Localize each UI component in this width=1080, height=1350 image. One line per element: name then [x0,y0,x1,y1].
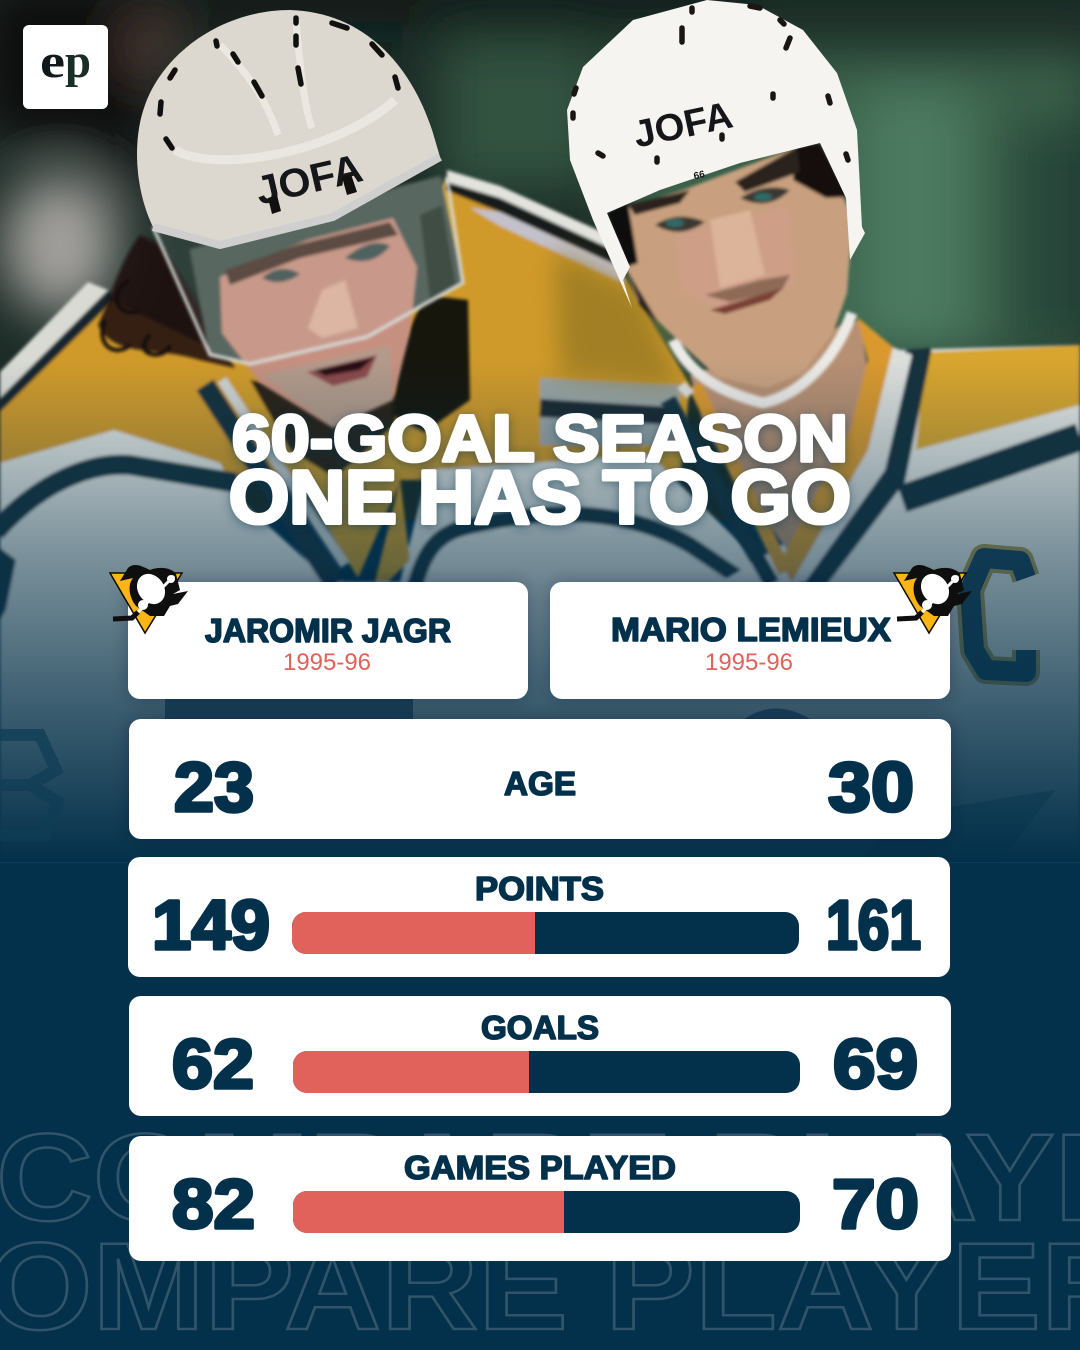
title: ONE HAS TO GO [229,455,851,539]
panel: Mario Lemieux name: 1995-96 [705,649,793,676]
brand logo [23,25,108,109]
panel: games played [129,1136,951,1261]
panel: points: 161 [826,886,921,964]
brand logo: p [65,35,91,88]
panel: age: 23 [174,748,254,826]
right player helmet: 66 [693,169,706,182]
panel: points: 149 [152,886,270,964]
right player helmet [567,0,865,308]
right player helmet: JOFA [630,95,736,156]
panel: points [128,857,950,977]
panel: goals: 62 [172,1025,254,1103]
right player chin strap and face [607,143,857,403]
panel: age: AGE [504,765,576,802]
left player helmet [137,10,440,245]
left player visor and face [153,175,463,428]
panel: games played: 82 [172,1165,255,1243]
brand logo: e [40,35,65,88]
title [229,401,851,539]
panel: Jaromir Jagr name [128,582,528,699]
panel: age: 30 [828,748,914,826]
captain C patch [970,558,1026,672]
panel: games played: 70 [832,1165,919,1243]
panel: Jaromir Jagr name: JAROMIR JAGR [205,612,451,649]
fade overlay to navy [0,360,1080,862]
left player hair [98,235,470,432]
icon: Penguins logo left [110,565,188,633]
icon: Penguins logo right [894,565,972,633]
panel: Mario Lemieux name: MARIO LEMIEUX [611,611,891,648]
panel: points: POINTS [475,870,604,907]
panel: goals: 69 [833,1025,918,1103]
watermark: compare player outline text [0,1109,1080,1350]
olive shadow on left player's shoulder [555,250,680,385]
panel: Mario Lemieux name [550,582,950,699]
panel: age [129,719,951,839]
right player jersey and collar [668,317,1080,860]
left player jersey [0,170,800,862]
panel: Jaromir Jagr name: 1995-96 [283,649,371,676]
panel: goals: GOALS [481,1009,599,1046]
panel: games played: GAMES PLAYED [404,1149,676,1186]
left player helmet: JOFA [252,146,367,214]
title: 60-GOAL SEASON [232,401,848,475]
panel: goals [129,996,951,1116]
